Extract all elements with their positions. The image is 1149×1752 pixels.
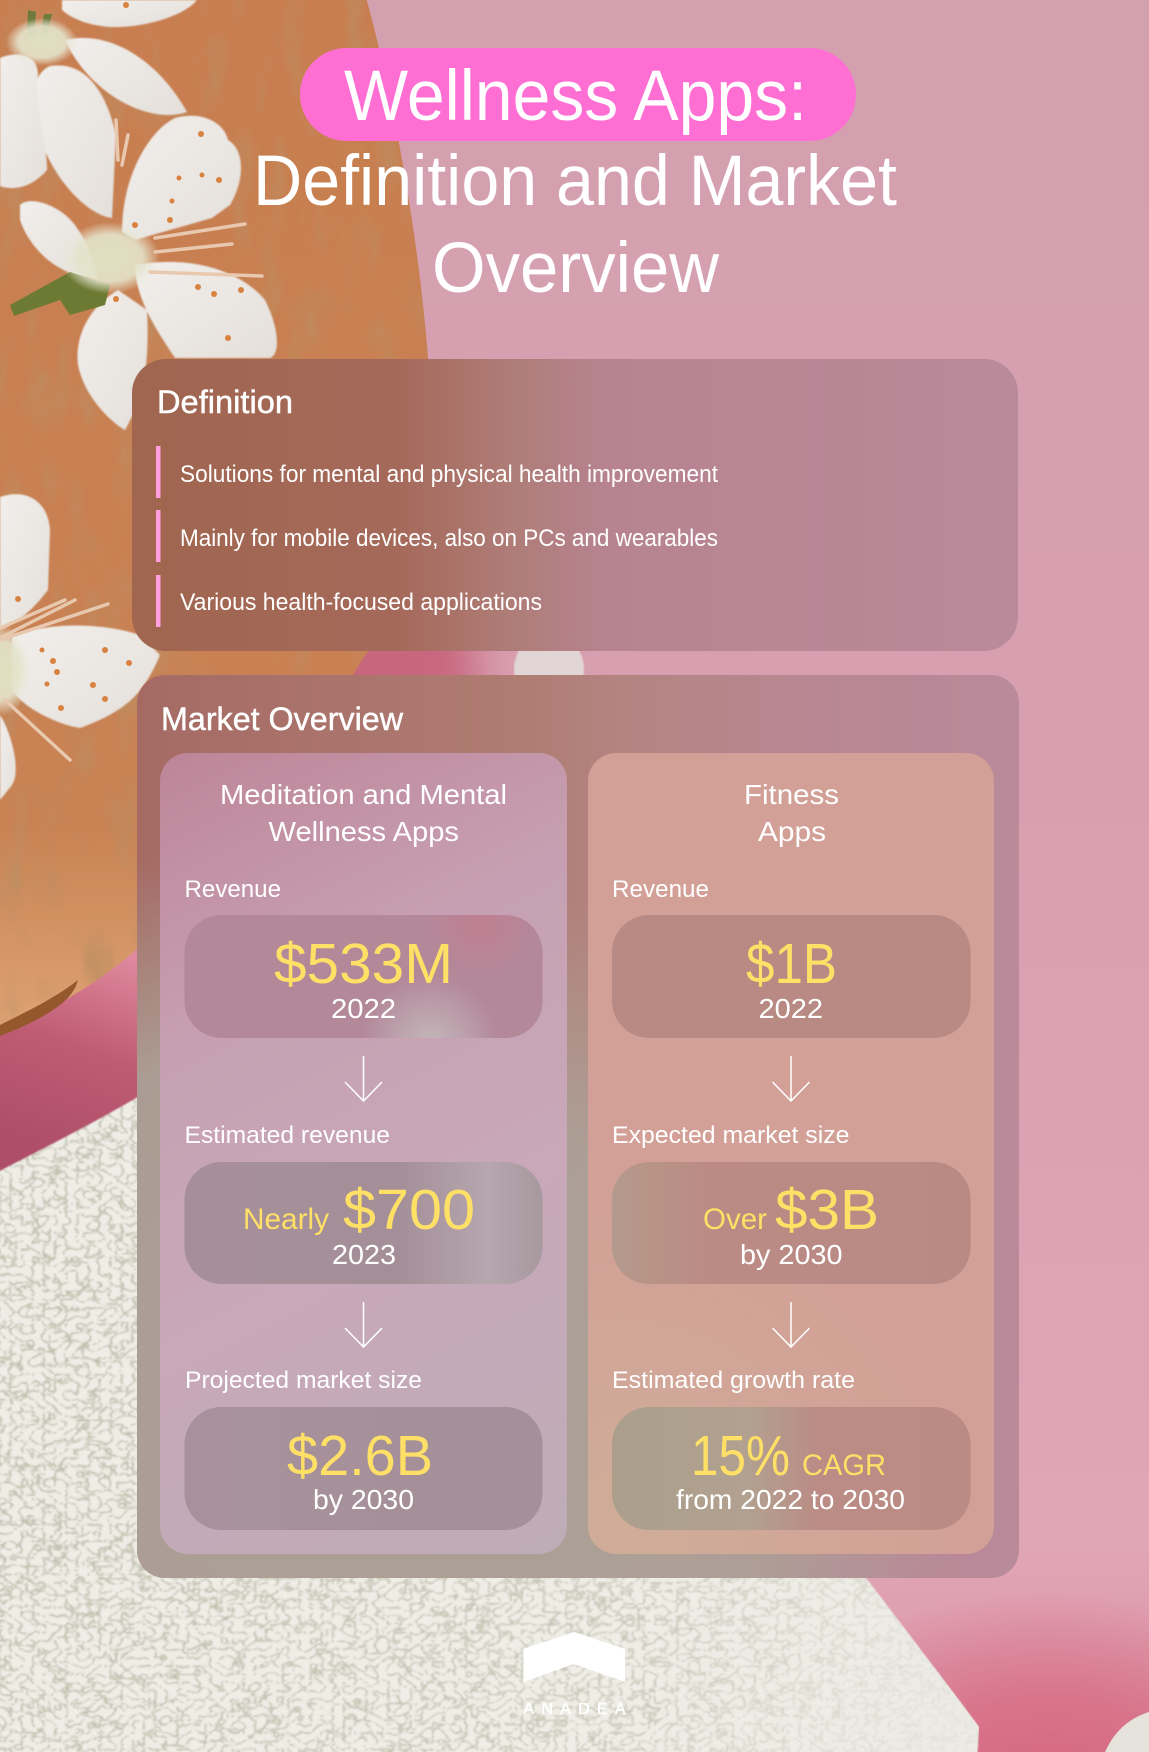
logo mark (524, 1632, 625, 1682)
panel: definition (132, 359, 1018, 651)
column heading: Fitness (744, 779, 839, 810)
column heading (744, 779, 839, 847)
metric: over $3B by 2030: by 2030 (740, 1239, 842, 1270)
metric: $1B 2022: $1B (746, 932, 837, 996)
panel: market overview (137, 675, 1019, 1578)
metric: $1B 2022: 2022 (758, 993, 823, 1024)
metric: $533M 2022 (184, 915, 542, 1038)
metric: 15% CAGR from 2022 to 2030: from 2022 to 2030 (676, 1484, 905, 1515)
label: estimated revenue: Estimated revenue (184, 1122, 390, 1149)
definition item 1 (156, 446, 718, 498)
title (253, 48, 897, 308)
metric: $2.6B by 2030: $2.6B (287, 1424, 433, 1488)
metric: nearly $700 2023: 2023 (332, 1239, 396, 1270)
title line 1: Wellness Apps: (344, 57, 807, 136)
title line 2: Definition and Market (253, 142, 897, 221)
metric: over $3B by 2030: Over (703, 1203, 767, 1236)
column heading: Meditation and Mental (220, 779, 507, 810)
column heading: Apps (758, 816, 826, 847)
label: revenue: Revenue (612, 876, 709, 903)
label: projected market size: Projected market size (185, 1367, 422, 1394)
metric: over $3B by 2030: $3B (775, 1178, 879, 1242)
column heading: Wellness Apps (268, 816, 459, 847)
logo: Anadea (524, 1632, 626, 1718)
column: meditation and mental wellness apps (160, 753, 567, 1554)
metric: nearly $700 2023: $700 (343, 1178, 475, 1242)
definition item 3 (156, 575, 542, 627)
metric: nearly $700 2023 (184, 1162, 542, 1284)
column heading (220, 779, 507, 847)
title highlight pill (300, 48, 856, 141)
metric: 15% CAGR from 2022 to 2030: CAGR (802, 1449, 886, 1482)
metric: 15% CAGR from 2022 to 2030 (612, 1407, 970, 1530)
definition item 2 (156, 510, 718, 562)
logo wordmark: ANADEA (524, 1701, 626, 1718)
arrow (772, 1056, 810, 1101)
definition heading: Definition (157, 384, 293, 420)
market overview heading: Market Overview (161, 701, 404, 737)
metric: $533M 2022: $533M (274, 932, 453, 996)
metric: 15% CAGR from 2022 to 2030: 15% (691, 1424, 790, 1488)
definition item 1: Solutions for mental and physical health improvement (180, 461, 718, 488)
title line 3: Overview (432, 229, 720, 308)
metric: $2.6B by 2030: by 2030 (313, 1484, 414, 1515)
label: revenue: Revenue (184, 876, 281, 903)
metric: $533M 2022: 2022 (331, 993, 396, 1024)
metric: $1B 2022 (612, 915, 970, 1038)
metric: over $3B by 2030 (612, 1162, 970, 1284)
label: expected market size: Expected market size (612, 1122, 850, 1149)
label: estimated growth rate: Estimated growth rate (612, 1367, 855, 1394)
arrow (345, 1056, 382, 1101)
definition item 2: Mainly for mobile devices, also on PCs and wearables (180, 525, 718, 552)
arrow (772, 1302, 810, 1347)
definition item 3: Various health-focused applications (180, 589, 542, 616)
metric: nearly $700 2023: Nearly (243, 1203, 329, 1236)
column: fitness apps (588, 753, 994, 1554)
arrow (345, 1302, 382, 1347)
metric: $2.6B by 2030 (184, 1407, 542, 1530)
